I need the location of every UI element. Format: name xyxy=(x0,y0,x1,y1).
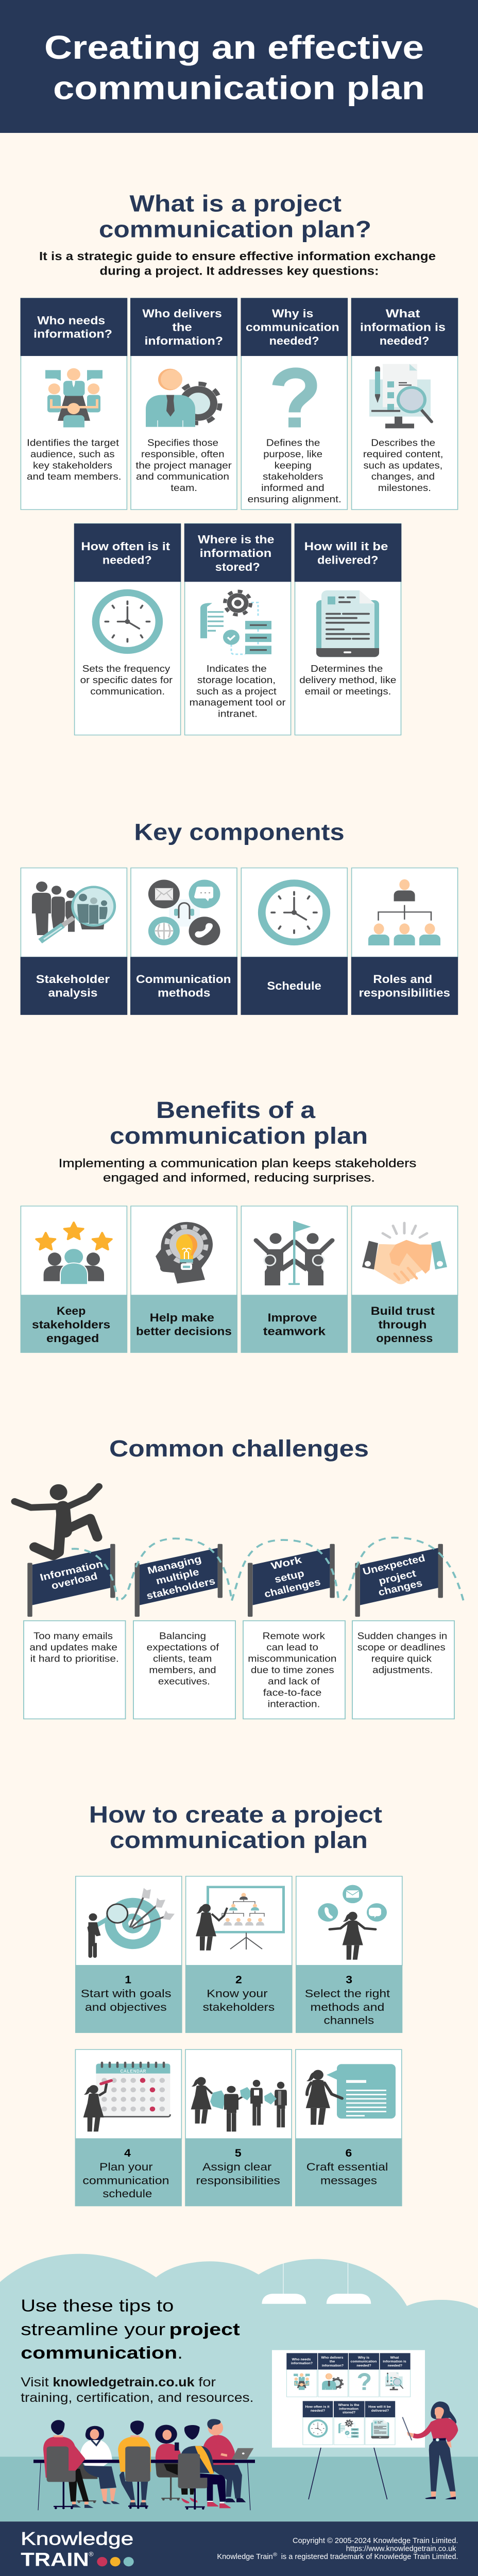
poster: miniature of question cards: information xyxy=(339,2408,358,2411)
sign: work setup challenges: setup xyxy=(274,1568,305,1585)
back row seated team upper bodies xyxy=(80,2419,253,2469)
step 1 card: Start with goals xyxy=(81,1987,172,1999)
heading: key components: Key components xyxy=(134,820,345,845)
step 1 card: 1 xyxy=(125,1974,131,1986)
heading: what is a plan: What is a project xyxy=(130,191,342,217)
navy trousers, yellow jumper man xyxy=(120,2469,148,2507)
person: man in yellow, back view xyxy=(118,2420,151,2482)
copyright text: https://www.knowledgetrain.co.uk xyxy=(346,2545,456,2553)
card: how often is it needed: or specific dates for xyxy=(80,675,173,686)
copyright text: is a registered trademark of Knowledge Train Limited. xyxy=(281,2553,458,2561)
step 2 card xyxy=(185,1876,293,2033)
heading: how to create xyxy=(89,1802,382,1854)
card: improve teamwork: Improve xyxy=(268,1311,317,1324)
card: help make better decisions: better decisions xyxy=(136,1325,232,1337)
card: where is the information stored: Where is the xyxy=(198,533,275,546)
poster: miniature of question cards xyxy=(272,2350,425,2448)
step 4 card: communication xyxy=(82,2174,169,2187)
poster: miniature of question cards: What xyxy=(390,2356,399,2360)
sign: work setup challenges: challenges xyxy=(263,1577,322,1600)
step 3 card: Select the right xyxy=(305,1987,390,1999)
sign: unexpected project changes: Unexpected xyxy=(362,1553,426,1578)
card: why is communication needed: purpose, like xyxy=(263,449,322,460)
card: who delivers the information: Who delivers xyxy=(142,307,222,320)
person: man in red, back view xyxy=(43,2420,86,2482)
heading: how to create: communication plan xyxy=(110,1827,368,1854)
card: communication methods: Communication xyxy=(136,973,231,986)
sign: managing multiple stakeholders: Managing xyxy=(146,1554,202,1577)
icon: people under magnifier xyxy=(32,882,115,941)
step 6 card: messages xyxy=(320,2174,377,2187)
intro text: engaged and informed, reducing surprises. xyxy=(103,1171,375,1184)
card: why is communication needed: Why is xyxy=(272,307,313,320)
empty chair backs xyxy=(72,2463,179,2479)
background hills xyxy=(0,2254,478,2456)
title banner xyxy=(0,0,478,133)
card: who delivers the information: information? xyxy=(144,334,223,347)
heading: what is a plan: communication plan? xyxy=(99,216,371,243)
section: what is a project communication plan xyxy=(21,191,458,735)
text box: managing stakeholders: Balancing xyxy=(159,1631,206,1641)
poster: miniature of question cards: information? xyxy=(291,2362,313,2365)
card: communication methods: methods xyxy=(158,986,210,999)
card: what information is needed: information is xyxy=(360,321,446,333)
card: keep stakeholders engaged: Keep xyxy=(57,1304,86,1317)
text box: managing stakeholders xyxy=(133,1621,235,1719)
poster: miniature of question cards: needed? xyxy=(311,2409,325,2413)
card: build trust through openness: Build trust xyxy=(371,1304,435,1317)
step 3 card xyxy=(296,1876,402,2033)
call to action text: Visit xyxy=(21,2376,49,2389)
sign: managing multiple stakeholders xyxy=(135,1544,223,1617)
card: who delivers the information: and communication xyxy=(136,471,229,482)
text box: work setup: and lack of xyxy=(268,1676,320,1687)
card: how will it be delivered: Determines the xyxy=(311,664,383,674)
card: who needs information: key stakeholders xyxy=(33,460,112,471)
text box: work setup: can lead to xyxy=(266,1642,318,1653)
text box: unexpected changes: Sudden changes in xyxy=(357,1631,447,1641)
poster: miniature of question cards: information is xyxy=(383,2360,406,2364)
step 4 card xyxy=(75,2049,182,2206)
intro text xyxy=(39,250,436,278)
icon: meeting group xyxy=(45,368,103,428)
card: why is communication needed: needed? xyxy=(269,334,319,347)
text box: work setup: due to time zones xyxy=(251,1665,334,1675)
heading: what is a plan xyxy=(99,191,371,243)
card: who needs information: and team members. xyxy=(27,471,121,482)
icon: presenter with org chart xyxy=(196,1887,283,1951)
sign: information overload xyxy=(27,1544,115,1617)
step 2 card: Know your xyxy=(207,1987,268,1999)
icon: woman juggling channels xyxy=(318,1885,387,1960)
step 1 card: and objectives xyxy=(85,2001,167,2013)
poster: miniature of question cards: communication xyxy=(351,2360,377,2364)
step 5 card: 5 xyxy=(235,2147,242,2159)
card: how will it be delivered: delivered? xyxy=(317,553,378,566)
icon: hurdling runner xyxy=(14,1484,99,1555)
card: what information is needed: needed? xyxy=(380,334,429,347)
text box: unexpected changes: scope or deadlines xyxy=(357,1642,446,1653)
step 5 card: responsibilities xyxy=(196,2174,280,2187)
heading: benefits xyxy=(110,1097,368,1149)
step 6 card xyxy=(295,2049,402,2206)
call to action text: training, certification, and resources. xyxy=(21,2391,253,2405)
card: roles and responsibilities: Roles and xyxy=(373,973,432,986)
logo: knowledge train: ® xyxy=(89,2551,94,2558)
card: who delivers the information xyxy=(130,298,237,510)
call to action text: knowledgetrain.co.uk xyxy=(53,2376,195,2389)
sign: information overload: overload xyxy=(50,1571,99,1591)
step 5 card xyxy=(185,2049,292,2206)
front row people backs and chairs xyxy=(43,2420,214,2488)
card: schedule: Schedule xyxy=(267,979,321,992)
step 6 card: Craft essential xyxy=(306,2161,388,2173)
section: key components xyxy=(21,820,458,1015)
card: where is the information stored: stored? xyxy=(215,561,260,573)
card: why is communication needed: informed and xyxy=(261,483,325,494)
card: where is the information stored: storage location, xyxy=(197,675,276,686)
card: what information is needed: Describes the xyxy=(371,437,435,448)
text box: information overload xyxy=(24,1621,126,1719)
card: who needs information: Who needs xyxy=(37,314,105,327)
copyright text xyxy=(217,2537,458,2561)
logo: knowledge train: TRAIN xyxy=(21,2549,89,2570)
card: who delivers the information: the xyxy=(172,321,192,333)
sign: unexpected project changes: changes xyxy=(377,1578,423,1598)
person: woman in white shirt xyxy=(80,2426,112,2466)
text box: information overload: Too many emails xyxy=(33,1631,113,1641)
step 4 card: 4 xyxy=(124,2147,131,2159)
card: help make better decisions xyxy=(130,1206,237,1353)
card: why is communication needed: ensuring alignment. xyxy=(248,494,342,505)
table xyxy=(33,2460,255,2463)
copyright text: ® xyxy=(273,2552,277,2558)
step 3 card: channels xyxy=(324,2014,374,2026)
intro text xyxy=(59,1157,416,1184)
poster: miniature of question cards: stored? xyxy=(343,2411,355,2414)
card: where is the information stored xyxy=(184,523,291,735)
icon: stars above people xyxy=(36,1223,112,1284)
sign: unexpected project changes: project xyxy=(378,1568,417,1587)
person: woman in red with phone xyxy=(155,2425,181,2469)
card: improve teamwork: teamwork xyxy=(263,1325,326,1337)
card: why is communication needed: keeping xyxy=(275,460,312,471)
text box: managing stakeholders: clients, team xyxy=(153,1653,212,1664)
card: who needs information: information? xyxy=(33,327,112,340)
card: how will it be delivered: delivery method, like xyxy=(299,675,396,686)
logo: knowledge train xyxy=(21,2528,134,2570)
logo: knowledge train: Knowledge xyxy=(21,2528,133,2549)
card: why is communication needed xyxy=(241,298,348,510)
poster: miniature of question cards: the xyxy=(330,2360,335,2364)
card: how often is it needed xyxy=(74,523,181,735)
text box: work setup: face-to-face xyxy=(263,1687,321,1698)
icon: handshake xyxy=(362,1223,447,1284)
call to action text: communication xyxy=(21,2343,177,2363)
card: stakeholder analysis xyxy=(21,868,127,1015)
intro text: during a project. It addresses key questions: xyxy=(100,264,379,278)
card: how will it be delivered xyxy=(295,523,401,735)
step 5 card: Assign clear xyxy=(202,2161,271,2173)
icon: woman marking calendar xyxy=(83,2063,170,2131)
icon: communication channels xyxy=(148,879,220,945)
heading: how to create: How to create a project xyxy=(89,1802,382,1828)
card: who delivers the information: team. xyxy=(170,483,197,494)
arrow: dashed hurdle path xyxy=(72,1538,464,1601)
call to action text: project xyxy=(169,2319,240,2339)
card: keep stakeholders engaged: stakeholders xyxy=(32,1318,110,1331)
icon: teammates with flag xyxy=(256,1221,332,1285)
card: what information is needed xyxy=(351,298,458,510)
section: how to create a project communication plan xyxy=(75,1802,402,2206)
step 4 card: Plan your xyxy=(99,2161,153,2173)
floor xyxy=(0,2456,478,2521)
text box: work setup xyxy=(243,1621,345,1719)
title banner: communication plan xyxy=(53,70,425,107)
card: what information is needed: changes, and xyxy=(371,471,435,482)
heading: benefits: Benefits of a xyxy=(156,1097,315,1124)
call to action text: for xyxy=(198,2376,216,2389)
presenter woman xyxy=(402,2401,458,2499)
person: man in red smiling xyxy=(203,2419,253,2466)
copyright text: Knowledge Train xyxy=(217,2553,273,2561)
card: how will it be delivered: How will it be xyxy=(304,540,388,553)
icon: woman with speech bubble xyxy=(306,2064,396,2125)
card: who delivers the information: the project manager xyxy=(135,460,232,471)
text box: unexpected changes xyxy=(352,1621,454,1719)
card: where is the information stored: information xyxy=(200,547,271,560)
heading: common challenges: Common challenges xyxy=(109,1436,369,1462)
poster: miniature of question cards: How often is it xyxy=(305,2405,330,2409)
poster: miniature of question cards: delivered? xyxy=(371,2409,389,2413)
call to action text xyxy=(21,2296,253,2405)
front chairs xyxy=(54,2481,205,2510)
card: who needs information xyxy=(21,298,127,510)
sign: managing multiple stakeholders: stakeholders xyxy=(145,1576,216,1602)
text box: work setup: interaction. xyxy=(268,1699,320,1709)
card: where is the information stored: intranet. xyxy=(218,708,258,719)
call to action text: streamline your xyxy=(21,2319,165,2339)
icon: storage workflow xyxy=(200,591,271,654)
icon: target and arrows xyxy=(88,1888,175,1958)
step 1 card xyxy=(75,1876,182,2033)
icon: tablet document xyxy=(316,590,379,657)
card: stakeholder analysis: analysis xyxy=(48,986,97,999)
step 2 card: stakeholders xyxy=(203,2001,275,2013)
icon: question mark xyxy=(278,373,311,428)
card: who needs information: Identifies the target xyxy=(27,437,120,448)
intro text: Implementing a communication plan keeps stakeholders xyxy=(59,1157,416,1170)
text box: managing stakeholders: expectations of xyxy=(147,1642,219,1653)
sign: work setup challenges xyxy=(248,1544,335,1617)
card: where is the information stored: management tool or xyxy=(190,698,286,708)
intro text: It is a strategic guide to ensure effective information exchange xyxy=(39,250,436,263)
step 4 card: schedule xyxy=(103,2188,152,2200)
card: why is communication needed: communication xyxy=(246,321,339,333)
card: how often is it needed: communication. xyxy=(90,686,165,697)
text box: managing stakeholders: members, and xyxy=(149,1665,216,1675)
footer bar xyxy=(0,2521,478,2576)
poster: miniature of question cards: information? xyxy=(322,2364,344,2367)
card: what information is needed: milestones. xyxy=(378,483,431,494)
step 3 card: 3 xyxy=(346,1974,352,1986)
poster: miniature of question cards: needed? xyxy=(388,2364,402,2367)
card: keep stakeholders engaged xyxy=(21,1206,127,1353)
card: how often is it needed: needed? xyxy=(103,553,152,566)
text box: unexpected changes: adjustments. xyxy=(372,1665,433,1675)
poster: miniature of question cards: Who needs xyxy=(292,2358,311,2361)
icon: clock xyxy=(262,883,327,942)
person: man in vest, back view xyxy=(178,2425,214,2488)
step 6 card: 6 xyxy=(345,2147,352,2159)
poster: miniature of question cards: Where is the xyxy=(338,2403,360,2407)
card: where is the information stored: Indicates the xyxy=(207,664,267,674)
icon: person with gear xyxy=(146,369,220,427)
title banner: Creating an effective xyxy=(44,29,424,66)
text box: information overload: it hard to prioritise. xyxy=(30,1653,119,1664)
text box: unexpected changes: require quick xyxy=(371,1653,432,1664)
card: build trust through openness: openness xyxy=(376,1332,433,1345)
icon: document under magnifier xyxy=(369,364,432,428)
step 3 card: methods and xyxy=(311,2001,384,2013)
card: who needs information: audience, such as xyxy=(30,449,115,460)
card: communication methods xyxy=(130,868,237,1015)
text box: work setup: Remote work xyxy=(263,1631,325,1641)
section: benefits of a communication plan xyxy=(21,1097,458,1353)
icon: team exchanging documents xyxy=(191,2077,287,2131)
sign: information overload: Information xyxy=(39,1558,104,1583)
sign: work setup challenges: Work xyxy=(270,1554,303,1572)
poster: miniature of question cards: Who delivers xyxy=(321,2356,344,2360)
card: how often is it needed: Sets the frequency xyxy=(82,664,170,674)
card: build trust through openness: through xyxy=(378,1318,426,1331)
heading: benefits: communication plan xyxy=(110,1123,368,1149)
text box: information overload: and updates make xyxy=(29,1642,117,1653)
call to action text: Use these tips to xyxy=(21,2296,174,2315)
card: help make better decisions: Help make xyxy=(150,1311,214,1324)
card: who delivers the information: responsible, often xyxy=(141,449,225,460)
woman skirt and legs xyxy=(83,2466,120,2504)
sign: managing multiple stakeholders: multiple xyxy=(155,1567,200,1587)
card: why is communication needed: stakeholders xyxy=(263,471,323,482)
black trousers, red-sweater woman xyxy=(164,2464,198,2503)
navy trousers, smiling man xyxy=(211,2465,246,2502)
card: schedule xyxy=(241,868,348,1015)
step 2 card: 2 xyxy=(235,1974,242,1986)
text box: work setup: miscommunication xyxy=(248,1653,336,1664)
poster: miniature of question cards: needed? xyxy=(356,2364,371,2367)
card: what information is needed: required content, xyxy=(363,449,443,460)
card: roles and responsibilities xyxy=(351,868,458,1015)
sign: unexpected project changes xyxy=(355,1544,443,1617)
card: build trust through openness xyxy=(351,1206,458,1353)
text box: managing stakeholders: executives. xyxy=(158,1676,210,1687)
poster: miniature of question cards: How will it be xyxy=(368,2405,391,2409)
icon: woman marking calendar: CALENDAR xyxy=(121,2069,146,2074)
icon: head with lightbulb xyxy=(156,1222,213,1283)
icon: clock xyxy=(96,592,159,651)
card: what information is needed: What xyxy=(386,307,420,320)
card: keep stakeholders engaged: engaged xyxy=(46,1332,99,1345)
copyright text: Copyright © 2005-2024 Knowledge Train Limited. xyxy=(293,2537,458,2545)
black trousers, seated man xyxy=(69,2469,94,2508)
section: call to action scene xyxy=(0,2254,478,2521)
dark trousers, vest man xyxy=(200,2473,231,2508)
icon: ceiling lamps xyxy=(262,2263,371,2304)
card: roles and responsibilities: responsibilities xyxy=(359,986,450,999)
icon: org chart xyxy=(368,879,440,945)
call to action text: . xyxy=(177,2343,183,2363)
poster: miniature of question cards: Why is xyxy=(358,2356,369,2360)
seated team lower bodies and table xyxy=(33,2460,255,2510)
card: stakeholder analysis: Stakeholder xyxy=(36,973,110,986)
card: how often is it needed: How often is it xyxy=(81,540,170,553)
card: what information is needed: such as updates, xyxy=(364,460,442,471)
easel legs xyxy=(309,2448,387,2499)
card: why is communication needed: Defines the xyxy=(266,437,320,448)
section: common challenges xyxy=(14,1436,464,1719)
card: where is the information stored: such as a project xyxy=(196,686,277,697)
card: who delivers the information: Specifies those xyxy=(147,437,218,448)
card: how will it be delivered: email or meetings. xyxy=(305,686,391,697)
card: improve teamwork xyxy=(241,1206,348,1353)
